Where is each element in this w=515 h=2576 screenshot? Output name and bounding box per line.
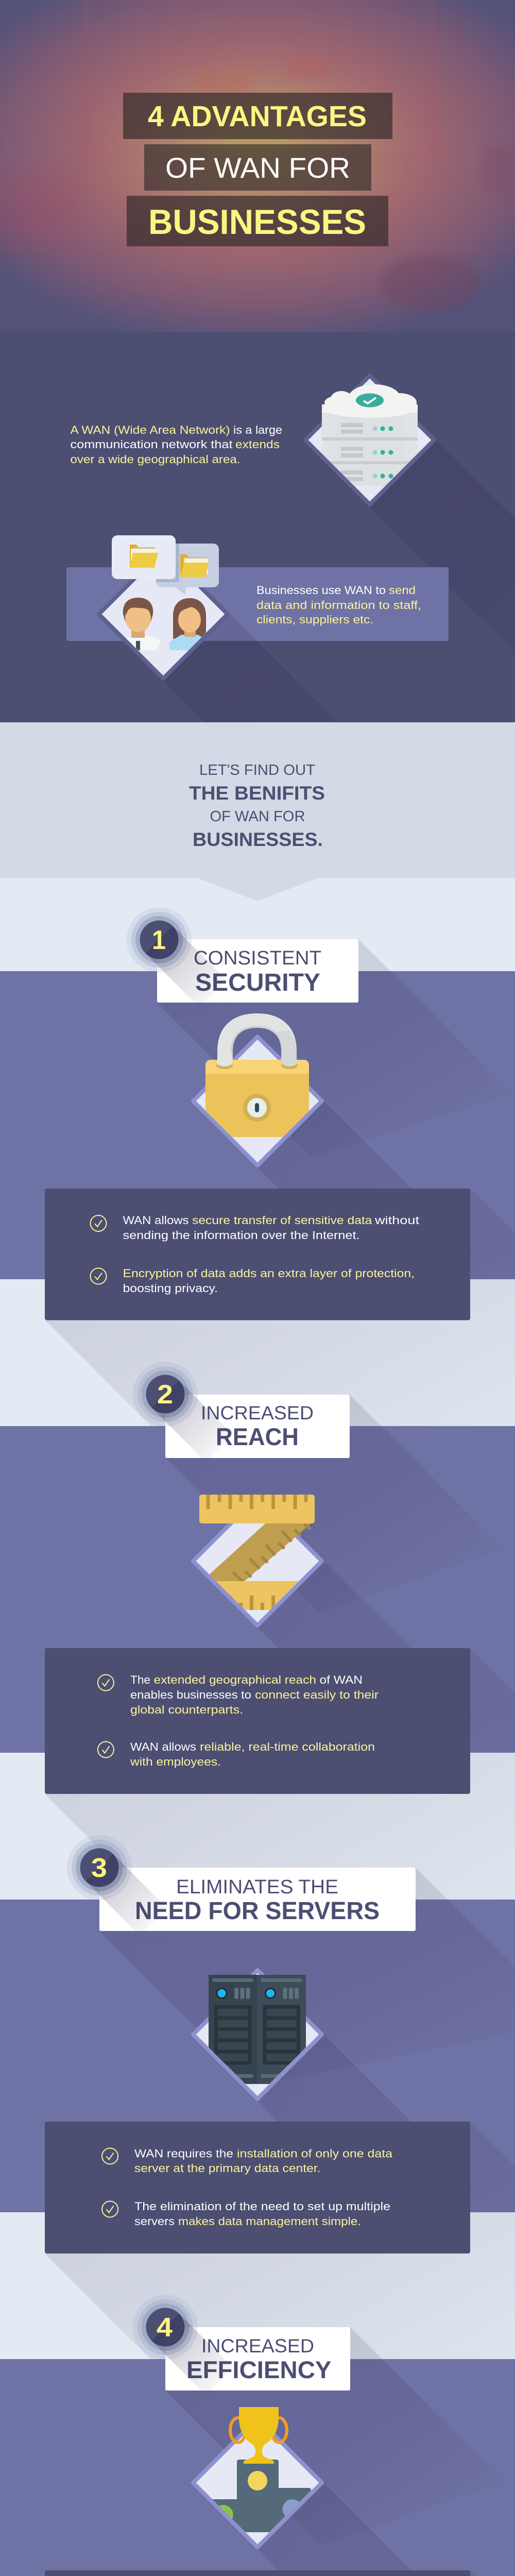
section 4 title card: EFFICIENCY xyxy=(186,2356,332,2383)
page background xyxy=(0,0,515,722)
intro text: WAN definition xyxy=(70,423,282,466)
section 3 mid band xyxy=(0,1900,515,2212)
bullet: encryption: boosting privacy. xyxy=(123,1282,218,1295)
title box: businesses xyxy=(127,196,388,246)
panel: businesses use WAN xyxy=(66,567,449,641)
intro shadow: people diamond xyxy=(163,614,436,887)
heading: let's find out the benefits: OF WAN FOR xyxy=(210,808,305,825)
section 2 title card: REACH xyxy=(216,1423,299,1450)
section 1 title card: SECURITY xyxy=(195,969,320,996)
diamond shadow 1 xyxy=(258,1101,478,1322)
heading: let's find out the benefits: LET'S FIND OUT xyxy=(199,762,315,778)
card shadow 4 xyxy=(165,2327,505,2545)
hero photo background xyxy=(0,0,515,332)
text: businesses use WAN: Businesses use WAN to xyxy=(256,584,386,597)
section 1 title card: CONSISTENT xyxy=(194,947,321,969)
bullet: geographical reach: extended geographical reach xyxy=(153,1673,316,1686)
section 1 title card xyxy=(157,939,358,1003)
bullet: secure transfer: WAN allows xyxy=(123,1214,188,1227)
bullet: geographical reach: The xyxy=(130,1673,150,1686)
bullet: simple data management: The elimination of the need to set up multiple xyxy=(134,2200,390,2213)
bullet: one data server xyxy=(102,2147,393,2175)
section 4 title card xyxy=(165,2327,350,2391)
bullet: simple data management: makes data management simple. xyxy=(178,2215,361,2228)
bullet: secure transfer: without xyxy=(374,1214,420,1227)
right rack xyxy=(261,1978,302,2078)
number badge 1: 1 xyxy=(152,925,166,955)
left rack xyxy=(212,1978,253,2078)
speech bubble: back folder xyxy=(156,544,219,595)
intro shadow: server diamond xyxy=(370,440,515,713)
section 1 light band xyxy=(0,878,515,971)
section 2 light band xyxy=(0,1279,515,1426)
card shadow 2 xyxy=(165,1395,504,1613)
card shadow 3 xyxy=(99,1868,515,2086)
bullet: secure transfer xyxy=(91,1214,420,1242)
panel: servers points xyxy=(45,2122,470,2253)
panel: efficiency points xyxy=(45,2570,470,2576)
icon: server racks in diamond xyxy=(193,1970,322,2099)
arrow pointer xyxy=(196,877,319,901)
intro text: WAN definition: is a large xyxy=(233,423,282,436)
section 2 title card xyxy=(165,1395,350,1458)
number badge 4 xyxy=(133,2295,233,2395)
bullet: geographical reach: enables businesses to xyxy=(130,1688,251,1701)
icon: people sharing files in diamond xyxy=(99,535,228,679)
intro text: WAN definition: communication network that xyxy=(70,438,233,451)
title box: businesses: BUSINESSES xyxy=(148,202,366,242)
bullet: secure transfer: secure transfer of sensitive data xyxy=(192,1214,372,1227)
diamond shadow 4 xyxy=(258,2483,478,2576)
number badge 3: 3 xyxy=(91,1853,107,1883)
number badge 1 xyxy=(127,907,227,1008)
heading: let's find out the benefits xyxy=(189,762,325,850)
heading: let's find out the benefits: THE BENIFITS xyxy=(189,783,325,804)
bullet: encryption: Encryption of data adds an extra layer of protection, xyxy=(123,1267,415,1280)
title xyxy=(123,93,392,246)
bullet: simple data management xyxy=(102,2200,390,2228)
section 4 title card: INCREASED xyxy=(201,2335,314,2357)
text: businesses use WAN: clients, suppliers etc. xyxy=(256,613,373,626)
heading: let's find out the benefits: BUSINESSES. xyxy=(193,829,323,850)
section 3 title card xyxy=(99,1868,416,1931)
speech bubble: front folder xyxy=(112,535,176,579)
section 3 title card: NEED FOR SERVERS xyxy=(135,1897,380,1925)
icon: measuring tape in diamond xyxy=(193,1495,322,1625)
text: businesses use WAN: send xyxy=(389,584,416,597)
diamond shadow 3 xyxy=(258,2035,478,2256)
number badge 4: 4 xyxy=(157,2313,173,2343)
panel shadow 2 xyxy=(45,1648,515,2000)
bullet: collaboration: reliable, real-time collaboration xyxy=(200,1740,375,1753)
bullet: geographical reach xyxy=(98,1673,379,1716)
intro text: WAN definition: extends xyxy=(235,438,280,451)
icon: trophy on podium in diamond xyxy=(193,2407,322,2547)
panel shadow 3 xyxy=(45,2122,515,2460)
icon: padlock in diamond xyxy=(193,1021,322,1165)
bullet: encryption xyxy=(91,1267,415,1295)
section 2 title card: INCREASED xyxy=(201,1402,314,1423)
section 2 mid band xyxy=(0,1426,515,1753)
section: benefits heading band xyxy=(0,722,515,878)
card shadow 1 xyxy=(157,939,513,1157)
panel shadow 4 xyxy=(45,2570,515,2576)
bullet: collaboration xyxy=(98,1740,375,1768)
woman xyxy=(169,598,206,650)
bullet: geographical reach: connect easily to their xyxy=(255,1688,379,1701)
title box: 4 advantages xyxy=(123,93,392,139)
bullet: simple data management: servers xyxy=(134,2215,175,2228)
man xyxy=(123,598,161,650)
text: businesses use WAN: data and information to staff, xyxy=(256,599,421,612)
bullet: one data server: server at the primary data center. xyxy=(134,2162,320,2175)
title box: of WAN for xyxy=(144,144,371,191)
bullet: secure transfer: sending the information over the Internet. xyxy=(123,1229,359,1242)
icon: folder xyxy=(180,554,209,577)
panel: reach points xyxy=(45,1648,470,1794)
bullet: geographical reach: global counterparts. xyxy=(130,1703,243,1716)
bullet: one data server: installation of only one data xyxy=(237,2147,393,2160)
bullet: collaboration: WAN allows xyxy=(130,1740,196,1753)
section 1 mid band xyxy=(0,971,515,1279)
number badge 3 xyxy=(67,1835,167,1935)
bullet: one data server: WAN requires the xyxy=(134,2147,233,2160)
panel shadow 1 xyxy=(45,1189,515,1526)
bullet: collaboration: with employees. xyxy=(130,1755,221,1768)
number badge 2 xyxy=(133,1362,233,1462)
intro text: WAN definition: A WAN (Wide Area Network) xyxy=(70,423,230,436)
panel: security points xyxy=(45,1189,470,1320)
bullet: geographical reach: of WAN xyxy=(319,1673,363,1686)
section 3 title card: ELIMINATES THE xyxy=(176,1876,338,1898)
icon: cloud server in diamond xyxy=(305,376,434,504)
intro text: WAN definition: over a wide geographical area. xyxy=(70,453,240,466)
section 4 light band xyxy=(0,2212,515,2359)
icon: folder xyxy=(130,545,158,568)
diamond shadow 2 xyxy=(258,1561,478,1782)
section 4 mid band xyxy=(0,2359,515,2576)
text: businesses use WAN xyxy=(256,584,421,626)
number badge 2: 2 xyxy=(157,1380,173,1410)
section 3 light band xyxy=(0,1753,515,1900)
title box: of WAN for: OF WAN FOR xyxy=(165,151,350,184)
title box: 4 advantages: 4 ADVANTAGES xyxy=(148,100,367,133)
